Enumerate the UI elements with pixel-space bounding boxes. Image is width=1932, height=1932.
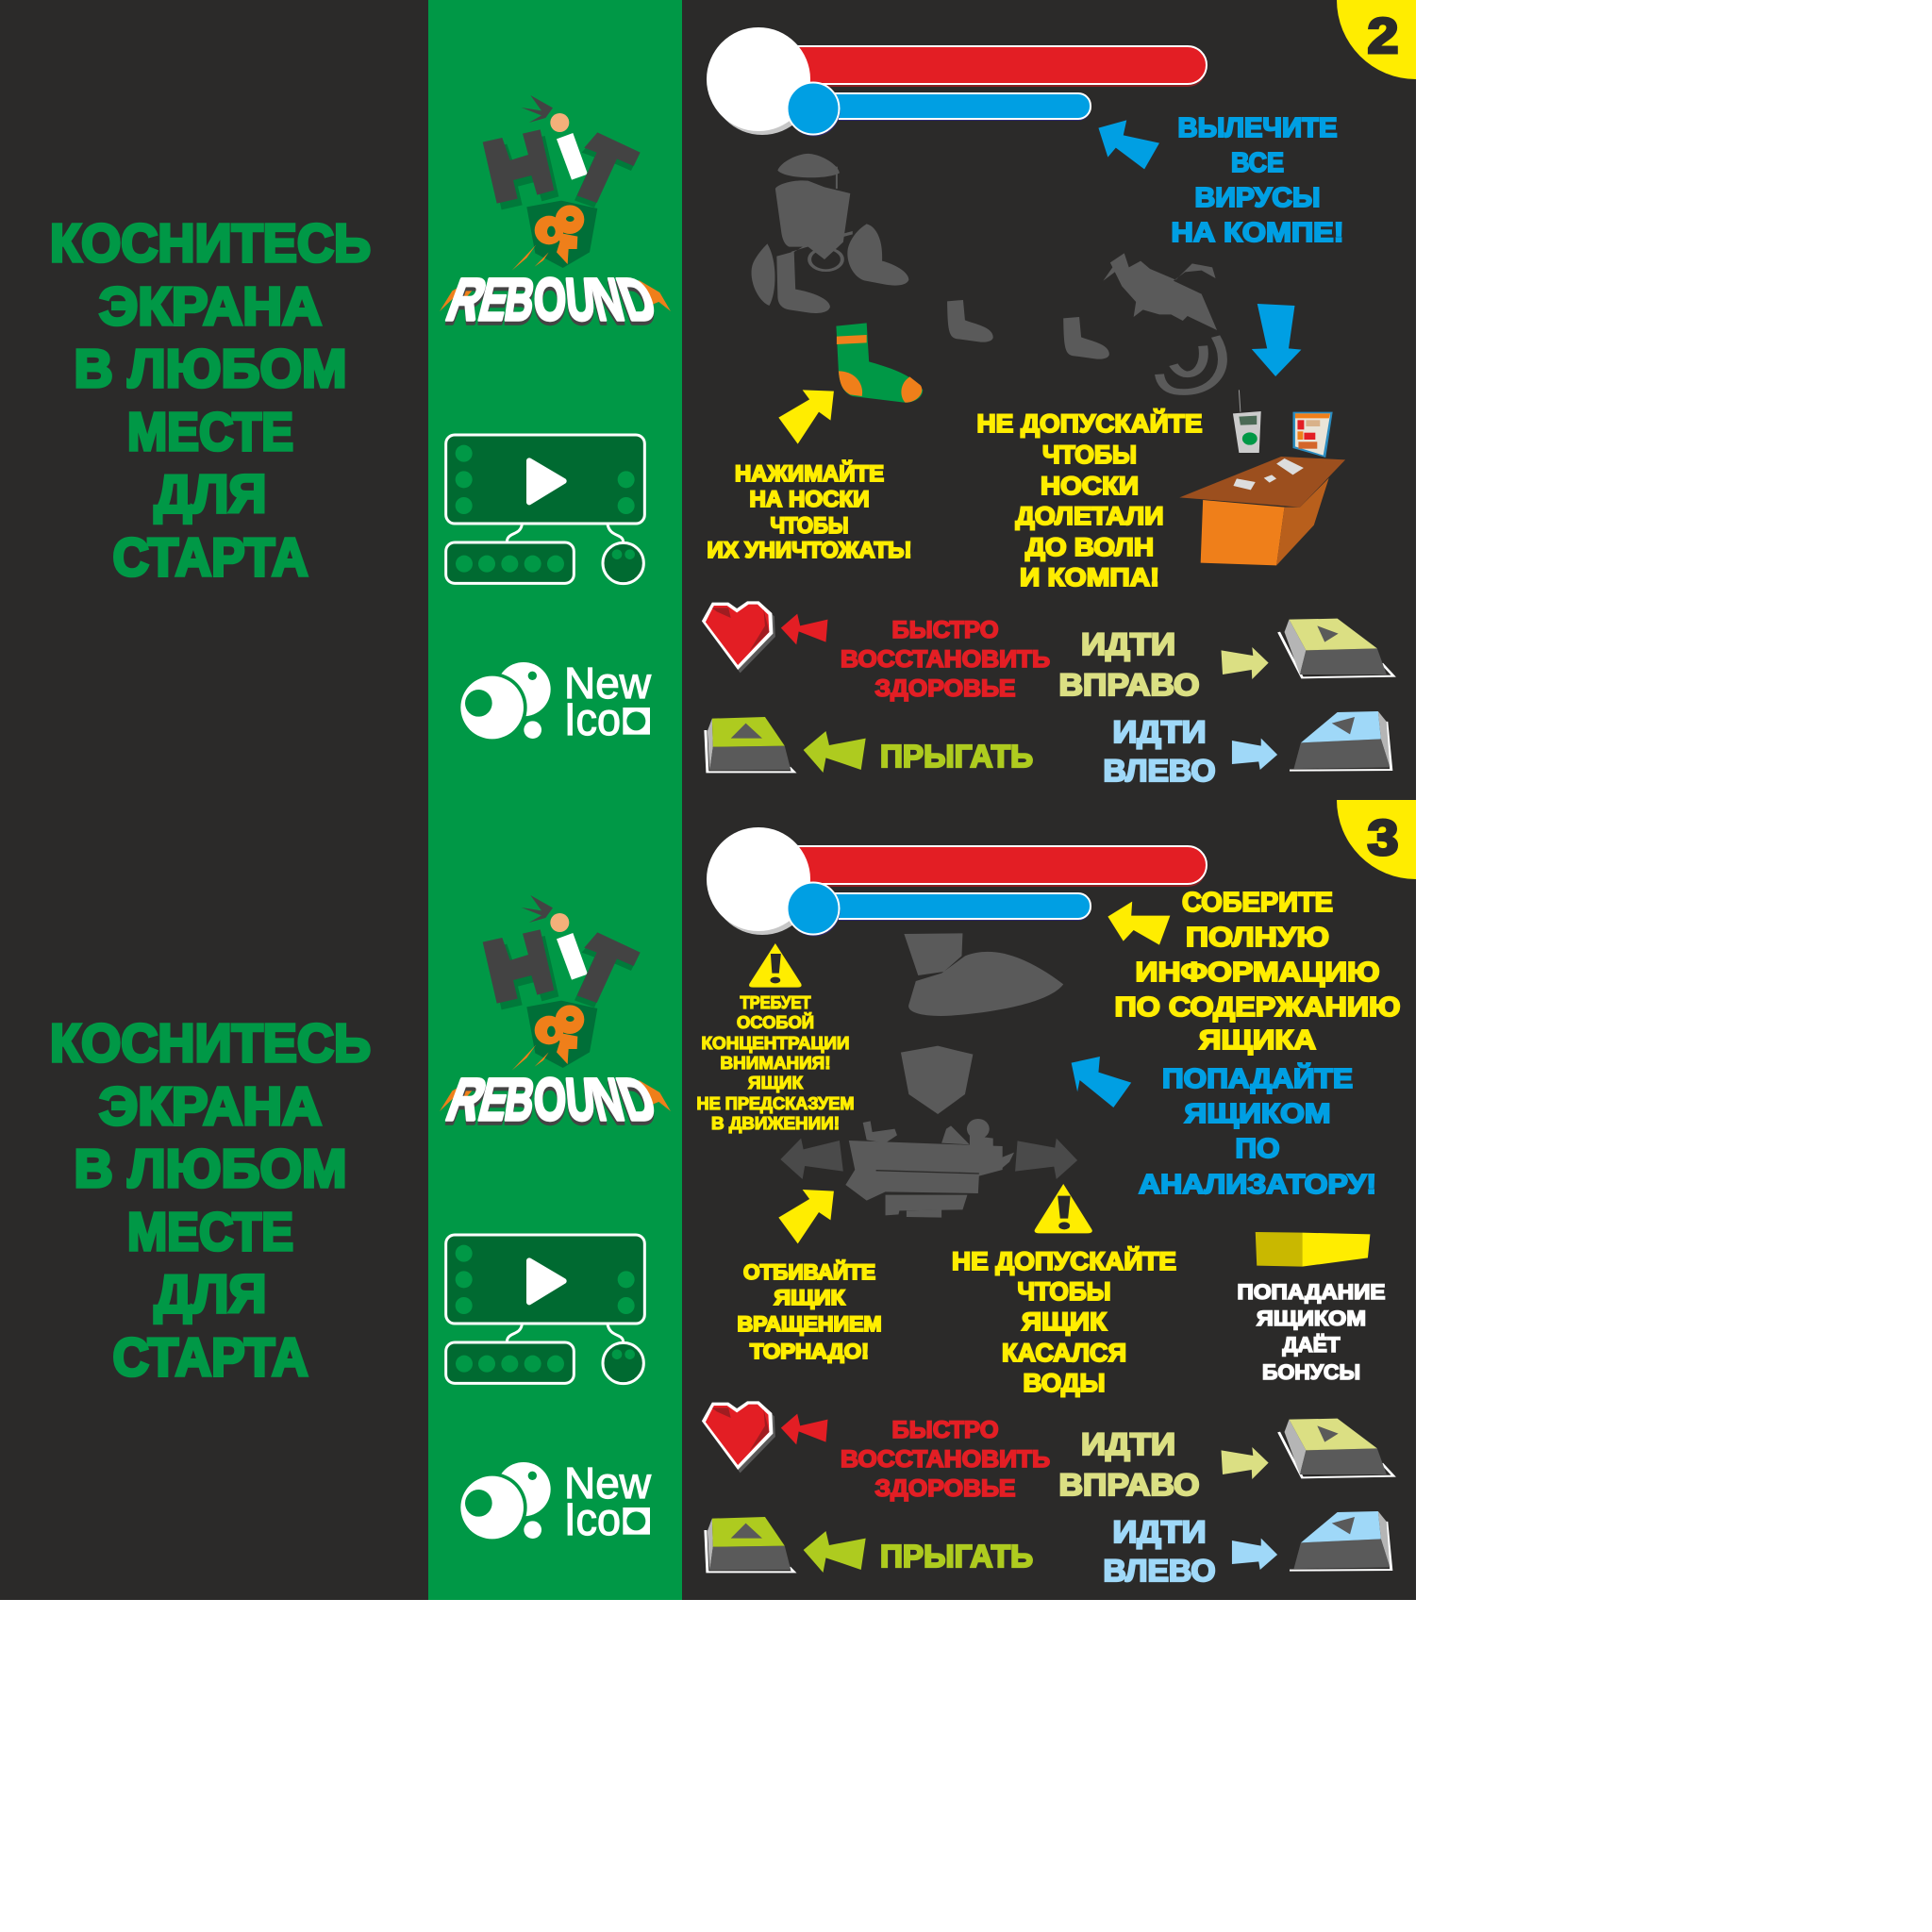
silhouette: hat dome: [904, 933, 1063, 1016]
text: cure viruses: ВЫЛЕЧИТЕ: [1177, 113, 1338, 143]
silhouette: shield box: [901, 1046, 973, 1114]
text: go right: ВПРАВО: [1058, 668, 1200, 702]
logo: Hit and Rebound, screen 2: U: [563, 268, 597, 333]
text: do not let socks reach: НОСКИ: [1041, 472, 1139, 500]
silhouette: flying sock 2: [1063, 317, 1109, 359]
text: hit the box with tornado: ВРАЩЕНИЕМ: [738, 1312, 881, 1336]
text: hit analyzer: [1139, 1062, 1376, 1200]
health and energy bars, screen 2: [707, 27, 1207, 136]
text: go right: ИДТИ: [1081, 627, 1175, 661]
text: go left: ИДТИ: [1113, 715, 1206, 749]
text: do not let socks reach: И КОМПА!: [1020, 563, 1159, 591]
text: jump: ПРЫГАТЬ: [880, 739, 1033, 774]
arrow: olive: [1222, 647, 1269, 679]
text: collect info: ИНФОРМАЦИЮ: [1136, 958, 1379, 988]
icon: computer with play button, screen 3: [446, 1235, 644, 1384]
text: restore health: ВОССТАНОВИТЬ: [841, 646, 1050, 673]
text: jump: ПРЫГАТЬ: [880, 1539, 1033, 1574]
icon: jump button: [706, 717, 794, 772]
arrow: blue to box: [1072, 1057, 1131, 1108]
text: restore health: [841, 617, 1050, 702]
text: bonus note: [1238, 1280, 1385, 1384]
icon: yellow box: [1256, 1232, 1370, 1267]
text: keep box away from water: ЧТОБЫ: [1017, 1277, 1111, 1306]
arrow: olive: [1222, 1447, 1269, 1479]
heading: start prompt, screen 3: В ЛЮБОМ: [74, 1139, 347, 1199]
text: bonus note: ПОПАДАНИЕ: [1238, 1280, 1385, 1304]
text: needs concentration: НЕ ПРЕДСКАЗУЕМ: [696, 1094, 855, 1113]
arrow: lime: [804, 1531, 866, 1573]
text: press socks: НАЖИМАЙТЕ: [735, 460, 884, 487]
logo: Hit and Rebound, screen 2: O: [534, 266, 566, 333]
text: go right: [1058, 627, 1200, 702]
text: hit the box with tornado: ОТБИВАЙТЕ: [743, 1260, 875, 1284]
text: press socks: [708, 460, 911, 563]
heading: start prompt, screen 2: СТАРТА: [113, 527, 308, 588]
health and energy bars, screen 3: [707, 827, 1207, 936]
text: needs concentration: [696, 993, 855, 1133]
text: collect info: СОБЕРИТЕ: [1182, 888, 1333, 918]
text: go right: ВПРАВО: [1058, 1468, 1200, 1502]
logo: Hit and Rebound, screen 2: N: [585, 266, 629, 333]
text: do not let socks reach: [977, 408, 1202, 591]
text: needs concentration: КОНЦЕНТРАЦИИ: [702, 1034, 849, 1053]
icon: warning triangle 1: [749, 943, 802, 988]
heading: start prompt, screen 2: В ЛЮБОМ: [74, 339, 347, 399]
text: needs concentration: ВНИМАНИЯ!: [721, 1054, 830, 1073]
silhouette: virus bug: [1103, 253, 1217, 330]
text: restore health: [841, 1417, 1050, 1502]
badge: step 2: [1337, 0, 1416, 79]
text: restore health: БЫСТРО: [892, 617, 998, 643]
controls row, screen 3: heart: [702, 1401, 775, 1473]
logo: Hit and Rebound, screen 3: N: [585, 1066, 629, 1133]
text: needs concentration: ТРЕБУЕТ: [740, 993, 811, 1012]
text: keep box away from water: [952, 1246, 1176, 1397]
text: go left: ИДТИ: [1113, 1515, 1206, 1549]
logo: New Ico, screen 2: Ico: [564, 695, 621, 745]
heading: start prompt, screen 3: СТАРТА: [113, 1327, 308, 1388]
arrow: light blue: [1232, 739, 1277, 770]
logo: Hit and Rebound, screen 3: B: [501, 1067, 539, 1133]
text: needs concentration: ОСОБОЙ: [737, 1012, 814, 1032]
heading: start prompt, screen 3: МЕСТЕ: [127, 1202, 293, 1262]
text: keep box away from water: НЕ ДОПУСКАЙТЕ: [952, 1246, 1176, 1275]
text: cure viruses: [1172, 113, 1343, 248]
silhouette: flying sock 1: [947, 300, 993, 342]
heading: start prompt, screen 2: МЕСТЕ: [127, 402, 293, 462]
arrow: blue down to computer: [1252, 304, 1301, 376]
controls row, screen 2: heart: [702, 601, 775, 673]
arrow: yellow to bars, screen 3: [1108, 902, 1170, 945]
text: press socks: ИХ УНИЧТОЖАТЬ!: [708, 538, 911, 563]
text: do not let socks reach: НЕ ДОПУСКАЙТЕ: [977, 408, 1202, 438]
text: go right: [1058, 1427, 1200, 1502]
text: keep box away from water: ВОДЫ: [1023, 1369, 1106, 1397]
text: do not let socks reach: ЧТОБЫ: [1042, 441, 1137, 469]
text: hit analyzer: ПО: [1236, 1134, 1279, 1164]
panel: right dark column: [682, 0, 1416, 1600]
arrow: yellow to box: [778, 1190, 834, 1243]
text: needs concentration: ЯЩИК: [748, 1074, 804, 1092]
text: hit the box with tornado: [738, 1260, 881, 1363]
text: do not let socks reach: ДОЛЕТАЛИ: [1015, 502, 1164, 530]
logo: New Ico, screen 2: [458, 658, 652, 745]
arrow: red: [781, 614, 827, 644]
panel: green column: [428, 0, 682, 1600]
arrows: gray left and right: [780, 1139, 1077, 1179]
arrow: yellow to sock: [778, 390, 834, 444]
text: restore health: ВОССТАНОВИТЬ: [841, 1446, 1050, 1473]
text: bonus note: ЯЩИКОМ: [1257, 1307, 1366, 1330]
heading: start prompt, screen 2: ЭКРАНА: [99, 276, 322, 337]
icon: computer with play button, screen 2: [446, 435, 644, 584]
text: hit analyzer: ЯЩИКОМ: [1185, 1099, 1330, 1129]
text: cure viruses: ВИРУСЫ: [1194, 183, 1321, 213]
panel: left dark column: [0, 0, 428, 1600]
text: go left: [1104, 1515, 1215, 1588]
text: press socks: ЧТОБЫ: [770, 513, 849, 539]
silhouette: sound waves: [1159, 337, 1223, 392]
text: cure viruses: ВСЕ: [1231, 148, 1284, 178]
logo: Hit and Rebound, screen 3: R: [439, 1067, 494, 1133]
text: go left: ВЛЕВО: [1104, 1554, 1215, 1588]
text: bonus note: БОНУСЫ: [1262, 1360, 1360, 1384]
silhouette: tornado desk: [845, 1119, 1014, 1218]
text: hit analyzer: АНАЛИЗАТОРУ!: [1139, 1170, 1376, 1200]
text: restore health: ЗДОРОВЬЕ: [875, 675, 1015, 702]
badge: step 3: 3: [1368, 810, 1398, 866]
text: keep box away from water: ЯЩИК: [1022, 1307, 1108, 1336]
logo: Hit and Rebound, screen 3: U: [563, 1068, 597, 1133]
logo: Hit and Rebound, screen 3: D: [609, 1067, 665, 1133]
icon: coloured sock: [836, 323, 923, 403]
logo: Hit and Rebound, screen 2: [439, 95, 671, 333]
text: do not let socks reach: ДО ВОЛН: [1025, 533, 1154, 561]
logo: New Ico, screen 3: [458, 1458, 652, 1545]
text: restore health: БЫСТРО: [892, 1417, 998, 1443]
text: cure viruses: НА КОМПЕ!: [1172, 218, 1343, 248]
heading: start prompt, screen 3: ДЛЯ: [155, 1264, 266, 1324]
heading: start prompt, screen 2: КОСНИТЕСЬ: [50, 213, 371, 274]
badge: step 2: 2: [1368, 8, 1398, 64]
text: press socks: НА НОСКИ: [749, 487, 870, 512]
heading: start prompt, screen 2: ДЛЯ: [155, 464, 266, 525]
logo: Hit and Rebound, screen 2: E: [473, 266, 517, 333]
text: hit analyzer: ПОПАДАЙТЕ: [1162, 1062, 1353, 1094]
text: go left: [1104, 715, 1215, 788]
text: collect info: ПОЛНУЮ: [1186, 923, 1329, 953]
logo: Hit and Rebound, screen 2: R: [439, 267, 494, 333]
text: collect info: [1115, 888, 1400, 1056]
heading: start prompt, screen 3: КОСНИТЕСЬ: [50, 1013, 371, 1074]
logo: New Ico, screen 3: New: [564, 1458, 652, 1507]
icon: right button: [1279, 619, 1393, 677]
logo: Hit and Rebound, screen 3: [439, 895, 671, 1133]
logo: Hit and Rebound, screen 2: B: [501, 267, 539, 333]
arrow: lime: [804, 731, 866, 773]
icon: desk with radio and poster: [1179, 390, 1345, 565]
icon: warning triangle 2: [1035, 1184, 1092, 1233]
logo: Hit and Rebound, screen 2: D: [609, 267, 665, 333]
text: needs concentration: В ДВИЖЕНИИ!: [711, 1114, 840, 1133]
silhouette: robot enemy: [751, 154, 908, 313]
heading: start prompt, screen 3: ЭКРАНА: [99, 1076, 322, 1137]
text: restore health: ЗДОРОВЬЕ: [875, 1475, 1015, 1502]
badge: step 3: [1337, 800, 1416, 879]
arrow: blue to bars: [1098, 120, 1159, 169]
text: collect info: ЯЩИКА: [1199, 1025, 1316, 1056]
icon: left button: [1290, 711, 1391, 771]
text: keep box away from water: КАСАЛСЯ: [1002, 1339, 1126, 1367]
text: hit the box with tornado: ЯЩИК: [774, 1286, 845, 1309]
icon: left button: [1290, 1511, 1391, 1571]
icon: jump button: [706, 1517, 794, 1572]
text: collect info: ПО СОДЕРЖАНИЮ: [1115, 992, 1400, 1023]
arrow: red: [781, 1414, 827, 1444]
heading: start prompt, screen 2: [50, 213, 371, 588]
logo: Hit and Rebound, screen 3: E: [473, 1066, 517, 1133]
logo: New Ico, screen 2: New: [564, 658, 652, 708]
icon: right button: [1279, 1419, 1393, 1477]
logo: New Ico, screen 3: Ico: [564, 1495, 621, 1545]
text: go left: ВЛЕВО: [1104, 754, 1215, 788]
heading: start prompt, screen 3: [50, 1013, 371, 1388]
text: bonus note: ДАЁТ: [1283, 1333, 1341, 1357]
text: go right: ИДТИ: [1081, 1427, 1175, 1461]
arrow: light blue: [1232, 1539, 1277, 1570]
text: hit the box with tornado: ТОРНАДО!: [750, 1340, 869, 1363]
logo: Hit and Rebound, screen 3: O: [534, 1066, 566, 1133]
